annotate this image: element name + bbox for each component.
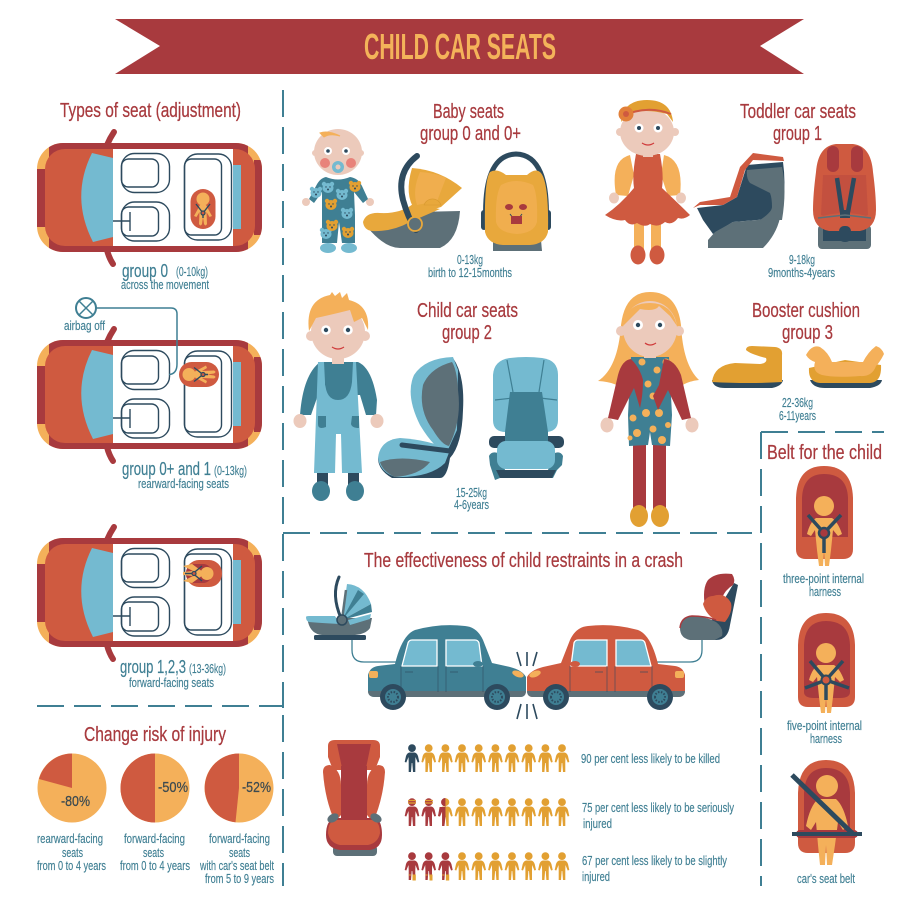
heading: belt for the child: Belt for the child (767, 441, 882, 464)
text: three-point harness (783, 572, 864, 599)
text: baby seat range (428, 253, 512, 280)
panel: child car seats (294, 292, 564, 512)
pictogram row: 90 per cent (405, 744, 569, 772)
pie chart: -50% (120, 754, 190, 822)
illustration: toddler seat front view (813, 144, 876, 249)
label: group 0: across the movement (121, 278, 209, 292)
text: 75 per cent: injured (583, 817, 612, 831)
text: toddler seat range (768, 253, 835, 280)
label: group 1,2,3: group 1,2,3 (120, 656, 186, 677)
icon: baby carrier (306, 577, 372, 640)
pie chart: -52%: -52% (242, 779, 271, 796)
text: toddler seat range: 9-18kg (789, 253, 815, 267)
heading: baby seats (420, 100, 521, 145)
label: group 0 (121, 260, 209, 292)
illustration: red car (527, 625, 685, 710)
pie label 2: seats (143, 846, 164, 860)
pie chart: -52% (204, 754, 274, 822)
text: child seat range: 4-6years (454, 498, 489, 512)
heading: booster cushion: group 3 (782, 321, 833, 344)
text: child seat range: 15-25kg (456, 486, 487, 500)
pictogram row: 75 per cent (405, 798, 569, 826)
heading: toddler car seats: group 1 (773, 122, 822, 145)
icon: collision lines (517, 652, 537, 719)
illustration: boy (294, 292, 384, 501)
pie label 1: from 0 to 4 years (37, 859, 106, 873)
pie label 1 (37, 832, 106, 873)
heading: child car seats: group 2 (442, 321, 492, 344)
illustration: large forward-facing seat (323, 740, 385, 856)
illustration: toddler seat side view (693, 153, 784, 248)
pie label 1: rearward-facing (37, 832, 103, 846)
label: group 0+ and 1: rearward-facing seats (138, 477, 229, 491)
pie label 3 (199, 832, 274, 886)
illustration: baby (302, 129, 374, 253)
pie label 2 (120, 832, 190, 873)
panel: belt for the child (767, 441, 882, 886)
text: baby seat range: 0-13kg (457, 253, 483, 267)
text: booster range (779, 396, 816, 423)
airbag off indicator: airbag off (64, 319, 105, 333)
connector lines (352, 640, 702, 662)
title banner: CHILD CAR SEATS (364, 26, 556, 67)
car diagram: group 0 (37, 132, 262, 264)
icon: car seat belt (792, 760, 862, 865)
illustration: child seat front view (489, 357, 564, 480)
text: booster range: 6-11years (779, 409, 816, 423)
illustration: teal car (368, 625, 526, 710)
illustration: booster front view (806, 346, 884, 388)
heading: toddler car seats: Toddler car seats (740, 100, 856, 123)
pie chart: -50%: -50% (158, 779, 188, 796)
label: group 0+ and 1: (0-13kg) (214, 464, 247, 478)
heading: child car seats: Child car seats (417, 299, 518, 322)
label: group 1,2,3: (13-36kg) (189, 662, 226, 676)
text: five-point harness: five-point internal (787, 719, 862, 733)
panel: toddler car seats (605, 100, 876, 280)
text: toddler seat range: 9months-4years (768, 266, 835, 280)
icon: child seat (680, 574, 738, 640)
text: five-point harness (787, 719, 862, 746)
illustration: infant seat front view (481, 154, 551, 251)
pie chart: -80%: -80% (61, 793, 90, 810)
pie label 3: from 5 to 9 years (205, 872, 274, 886)
heading: change risk: Change risk of injury (84, 723, 227, 746)
icon: three-point harness (796, 466, 853, 566)
car diagram: group 1,2,3 (37, 527, 262, 659)
pie label 3: with car's seat belt (199, 859, 274, 873)
label: group 0+ and 1 (122, 458, 247, 491)
text: 75 per cent: 75 per cent less likely to be seriously (582, 801, 735, 815)
pie label 3: forward-facing (209, 832, 270, 846)
text: baby seat range: birth to 12-15months (428, 266, 512, 280)
illustration: booster side view (712, 346, 783, 388)
label: group 0: (0-10kg) (176, 265, 208, 279)
text: child seat range (454, 486, 489, 512)
text: 67 per cent: injured (582, 870, 610, 884)
text: 75 per cent (582, 801, 735, 831)
pie label 1: seats (62, 846, 83, 860)
pie label 3: seats (229, 846, 250, 860)
text: 67 per cent: 67 per cent less likely to be slightly (582, 854, 728, 868)
text: booster range: 22-36kg (782, 396, 813, 410)
label: group 1,2,3 (120, 656, 226, 690)
heading: effectiveness: The effectiveness of child restraints in a crash (364, 549, 683, 572)
heading: child car seats (417, 299, 518, 344)
panel: booster cushion (598, 292, 884, 527)
car diagram: group 0+ and 1 (37, 329, 262, 461)
panel: effectiveness in a crash (306, 549, 738, 884)
text: three-point harness: three-point internal (783, 572, 864, 586)
heading: baby seats: Baby seats (433, 100, 504, 123)
pie chart: -80% (38, 754, 106, 822)
title banner (115, 19, 804, 74)
text: 90 per cent: 90 per cent less likely to be killed (581, 752, 720, 766)
label: group 1,2,3: forward-facing seats (129, 676, 214, 690)
heading: booster cushion (752, 299, 860, 344)
panel: change risk of injury (37, 723, 274, 886)
panel: baby seats (302, 100, 551, 280)
airbag off indicator (64, 298, 177, 374)
label: group 0+ and 1: group 0+ and 1 (122, 458, 211, 479)
text: five-point harness: harness (810, 732, 842, 746)
text: 67 per cent (582, 854, 728, 884)
panel: types of seat (37, 99, 262, 690)
heading: booster cushion: Booster cushion (752, 299, 860, 322)
illustration: older girl (598, 292, 699, 527)
label: group 0: group 0 (122, 260, 168, 281)
heading: types of seat: Types of seat (adjustment) (60, 99, 241, 122)
heading: toddler car seats (740, 100, 856, 145)
illustration: toddler girl (605, 100, 690, 264)
icon: five-point harness (798, 613, 855, 713)
text: car's seat belt: car's seat belt (797, 872, 855, 886)
section dividers (37, 90, 884, 886)
illustration: infant seat side view (363, 156, 462, 248)
pie label 2: forward-facing (124, 832, 185, 846)
heading: baby seats: group 0 and 0+ (420, 122, 521, 145)
pictogram row: 67 per cent (405, 852, 569, 880)
pie label 2: from 0 to 4 years (120, 859, 190, 873)
illustration: child seat side view (378, 357, 463, 478)
text: three-point harness: harness (809, 585, 841, 599)
